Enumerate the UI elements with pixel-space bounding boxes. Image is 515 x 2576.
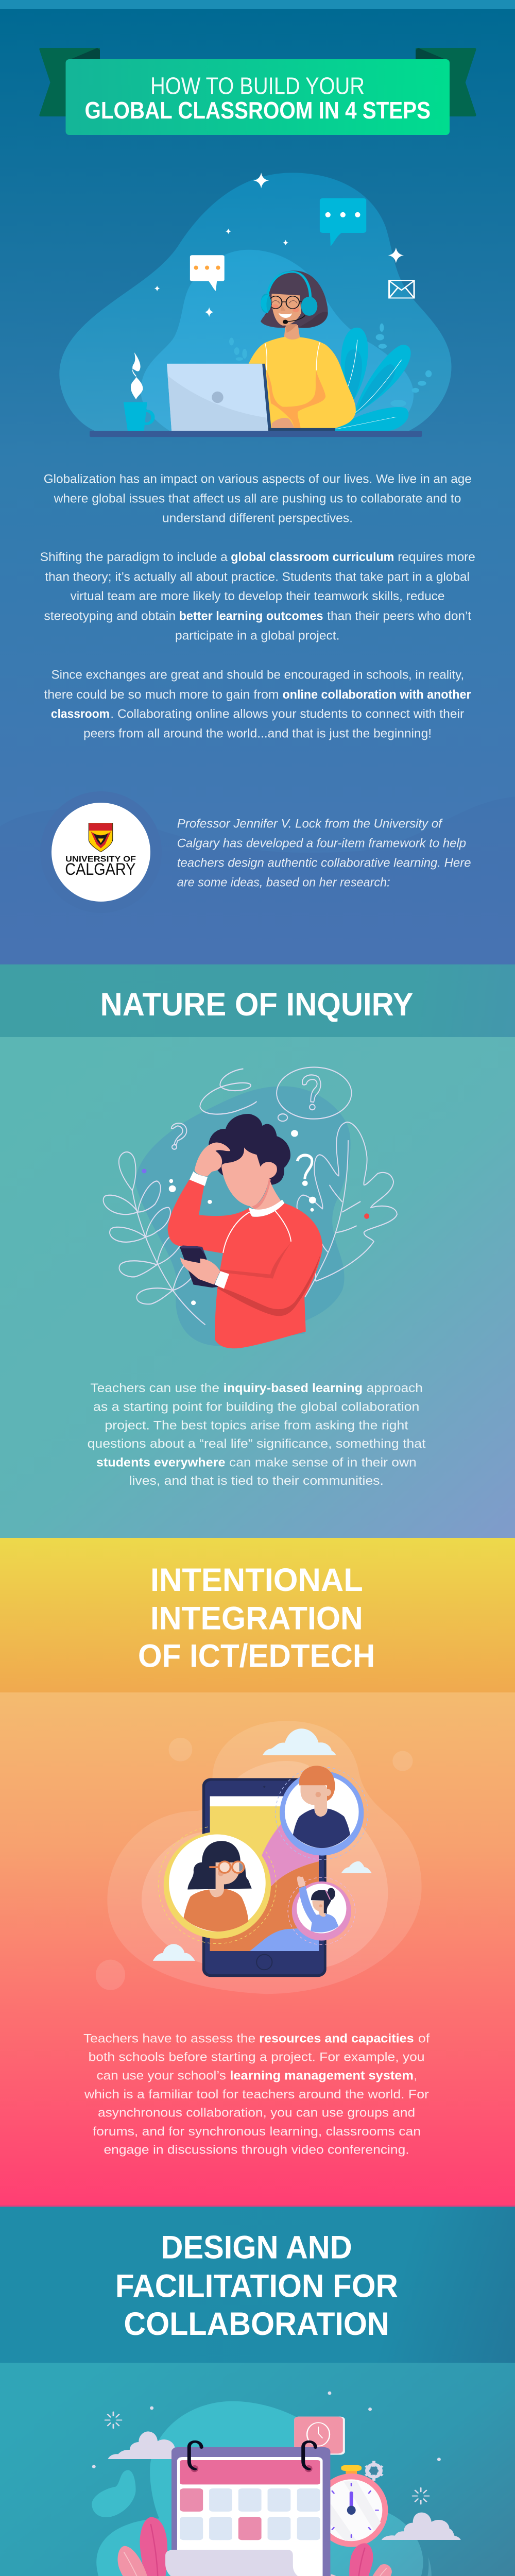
paragraph 3: Since exchanges are great and should be encouraged in schools, in reality, bbox=[52, 668, 464, 682]
integration text: Teachers have to assess the bbox=[83, 2031, 255, 2045]
badge white disc bbox=[52, 803, 150, 902]
paragraph 2: stereotyping and obtain bbox=[44, 609, 176, 623]
italic framework note bbox=[177, 817, 471, 890]
title line 2: GLOBAL CLASSROOM IN 4 STEPS bbox=[84, 97, 431, 124]
integration text: which is a familiar tool for teachers around the world. For bbox=[84, 2088, 429, 2102]
integration text: , bbox=[414, 2069, 417, 2082]
right leaves bbox=[328, 2543, 392, 2576]
inner blob bbox=[141, 250, 414, 431]
background blob small bbox=[92, 2470, 136, 2517]
paragraph 3: peers from all around the world...and that is just the beginning! bbox=[83, 727, 432, 741]
top band bbox=[0, 0, 515, 9]
crescent bbox=[404, 2557, 432, 2576]
big background blob bbox=[59, 173, 452, 431]
nature of inquiry text: can make sense of in their own bbox=[229, 1456, 417, 1470]
paragraph 3: there could be so much more to gain from bbox=[44, 688, 279, 702]
heading: intentional integration of ict/edtech bbox=[138, 1562, 375, 1674]
heading: intentional integration of ict/edtech: OF ICT/EDTECH bbox=[138, 1638, 375, 1674]
faint sprigs bbox=[229, 324, 432, 407]
sparkles and dots bbox=[76, 2392, 448, 2576]
background wave bbox=[0, 797, 515, 964]
heading: design and facilitation for collaboration: DESIGN AND bbox=[161, 2229, 352, 2265]
panel: intentional integration body bbox=[0, 1692, 515, 2207]
nature of inquiry text: inquiry-based learning bbox=[224, 1381, 363, 1395]
heading: design and facilitation for collaboration: COLLABORATION bbox=[124, 2306, 389, 2342]
badge outer ring bbox=[40, 791, 162, 913]
nature of inquiry text: students everywhere bbox=[96, 1456, 226, 1470]
panel: intentional integration header bbox=[0, 1538, 515, 1692]
paragraph 2: virtual team are more likely to develop their teamwork skills, reduce bbox=[70, 589, 445, 603]
nature of inquiry text: as a starting point for building the global collaboration bbox=[93, 1400, 419, 1414]
section divider strip bbox=[0, 2205, 515, 2207]
man figure bbox=[167, 1114, 322, 1348]
italic framework note: Calgary has developed a four-item framework to help bbox=[177, 837, 466, 851]
shield crest bbox=[89, 823, 113, 852]
integration text: asynchronous collaboration, you can use groups and bbox=[98, 2106, 415, 2120]
heading: design and facilitation for collaboration: FACILITATION FOR bbox=[115, 2268, 398, 2304]
envelope icon bbox=[389, 280, 414, 298]
participant: waving girl bbox=[288, 1876, 355, 1944]
paragraph 2: than their peers who don’t bbox=[327, 609, 472, 623]
blue speech bubble bbox=[320, 198, 366, 246]
clouds bbox=[108, 2431, 461, 2540]
paragraph 1: Globalization has an impact on various aspects of our lives. We live in an age bbox=[44, 472, 472, 486]
paragraph 3: . Collaborating online allows your students to connect with their bbox=[110, 707, 464, 721]
integration text: resources and capacities bbox=[259, 2031, 414, 2045]
heading: nature of inquiry: NATURE OF INQUIRY bbox=[100, 987, 413, 1023]
paragraph 1: understand different perspectives. bbox=[162, 511, 353, 525]
laptop bbox=[167, 364, 335, 431]
line art plants and question marks bbox=[104, 1067, 397, 1325]
illustration: woman with headset at laptop bbox=[59, 173, 452, 437]
wall clock tile bbox=[294, 2417, 345, 2455]
background blob large bbox=[96, 2401, 423, 2576]
woman bbox=[249, 270, 356, 428]
paragraph 2: better learning outcomes bbox=[179, 609, 323, 623]
tablet bbox=[202, 1778, 327, 1977]
paragraph 2: Shifting the paradigm to include a bbox=[40, 550, 228, 564]
nature of inquiry text bbox=[88, 1381, 426, 1488]
background blob bbox=[135, 1086, 351, 1346]
paragraph 2: global classroom curriculum bbox=[231, 550, 394, 564]
integration text: can use your school’s bbox=[97, 2069, 226, 2082]
integration text: forums, and for synchronous learning, classrooms can bbox=[93, 2125, 421, 2139]
background blob outer bbox=[107, 1721, 422, 1994]
participant: woman with glasses bbox=[159, 1826, 276, 1944]
italic framework note: are some ideas, based on her research: bbox=[177, 876, 390, 890]
ribbon right tail bbox=[416, 48, 476, 116]
nature of inquiry text: approach bbox=[367, 1381, 423, 1395]
integration text: learning management system bbox=[230, 2069, 414, 2082]
integration text bbox=[83, 2031, 430, 2157]
nature of inquiry text: lives, and that is tied to their communities. bbox=[129, 1474, 384, 1488]
participant: red-haired man bbox=[276, 1766, 368, 1859]
nature of inquiry text: Teachers can use the bbox=[90, 1381, 219, 1395]
logo text university of: UNIVERSITY OF bbox=[65, 855, 136, 864]
white question mark bbox=[297, 1155, 312, 1186]
integration text: engage in discussions through video conferencing. bbox=[104, 2143, 409, 2157]
paragraph 3 bbox=[44, 668, 471, 741]
desk bbox=[90, 431, 422, 437]
coffee cup with steam bbox=[124, 352, 153, 431]
paragraph 3: classroom bbox=[51, 707, 110, 721]
ribbon left fold bbox=[71, 48, 100, 59]
panel: nature of inquiry header bbox=[0, 964, 515, 1037]
paragraph 3: online collaboration with another bbox=[282, 688, 471, 702]
panel: nature of inquiry body bbox=[0, 1037, 515, 1538]
paragraph 2 bbox=[40, 550, 475, 643]
paragraph 2: requires more bbox=[398, 550, 475, 564]
paragraph 2: than theory; it’s actually all about practice. Students that take part in a global bbox=[45, 570, 470, 584]
nature of inquiry text: project. The best topics arise from asking the right bbox=[105, 1418, 408, 1432]
left leaves bbox=[117, 2517, 187, 2576]
nature of inquiry text: questions about a “real life” significance, something that bbox=[88, 1437, 426, 1451]
decorative dots bbox=[142, 1130, 369, 1305]
panel: design and facilitation body bbox=[0, 2363, 515, 2576]
ribbon left tail bbox=[39, 48, 100, 116]
white speech bubble bbox=[190, 255, 225, 291]
university of calgary logo badge bbox=[40, 791, 162, 913]
italic framework note: teachers design authentic collaborative learning. Here bbox=[177, 856, 471, 870]
title ribbon bbox=[39, 48, 476, 135]
paragraph 1 bbox=[44, 472, 472, 525]
paragraph 2: participate in a global project. bbox=[175, 629, 339, 643]
title line 1: HOW TO BUILD YOUR bbox=[150, 72, 365, 99]
ribbon right fold bbox=[416, 48, 445, 59]
heading: intentional integration of ict/edtech: INTENTIONAL bbox=[150, 1562, 363, 1598]
background blob inner bbox=[142, 1761, 388, 1967]
intro text bbox=[40, 472, 475, 741]
clouds bbox=[153, 1728, 372, 1961]
calendar bbox=[165, 2442, 330, 2576]
panel: introduction background bbox=[0, 0, 515, 964]
stars bbox=[154, 173, 404, 317]
plant leaves bbox=[335, 328, 411, 431]
ribbon body bbox=[66, 59, 450, 135]
paragraph 1: where global issues that affect us all are pushing us to collaborate and to bbox=[54, 492, 461, 506]
panel: design and facilitation header bbox=[0, 2207, 515, 2363]
integration text: both schools before starting a project. For example, you bbox=[89, 2050, 425, 2064]
stopwatch bbox=[315, 2461, 388, 2547]
illustration: calendar and stopwatch bbox=[76, 2392, 461, 2576]
integration text: of bbox=[418, 2031, 430, 2045]
logo text calgary: CALGARY bbox=[65, 860, 135, 878]
soft circles bbox=[96, 1738, 413, 1990]
heading: design and facilitation for collaboration bbox=[115, 2229, 398, 2342]
heading: intentional integration of ict/edtech: INTEGRATION bbox=[150, 1600, 363, 1636]
illustration: tablet with video call participants bbox=[96, 1721, 422, 1994]
italic framework note: Professor Jennifer V. Lock from the University of bbox=[177, 817, 443, 831]
illustration: confused man with phone bbox=[104, 1067, 397, 1348]
